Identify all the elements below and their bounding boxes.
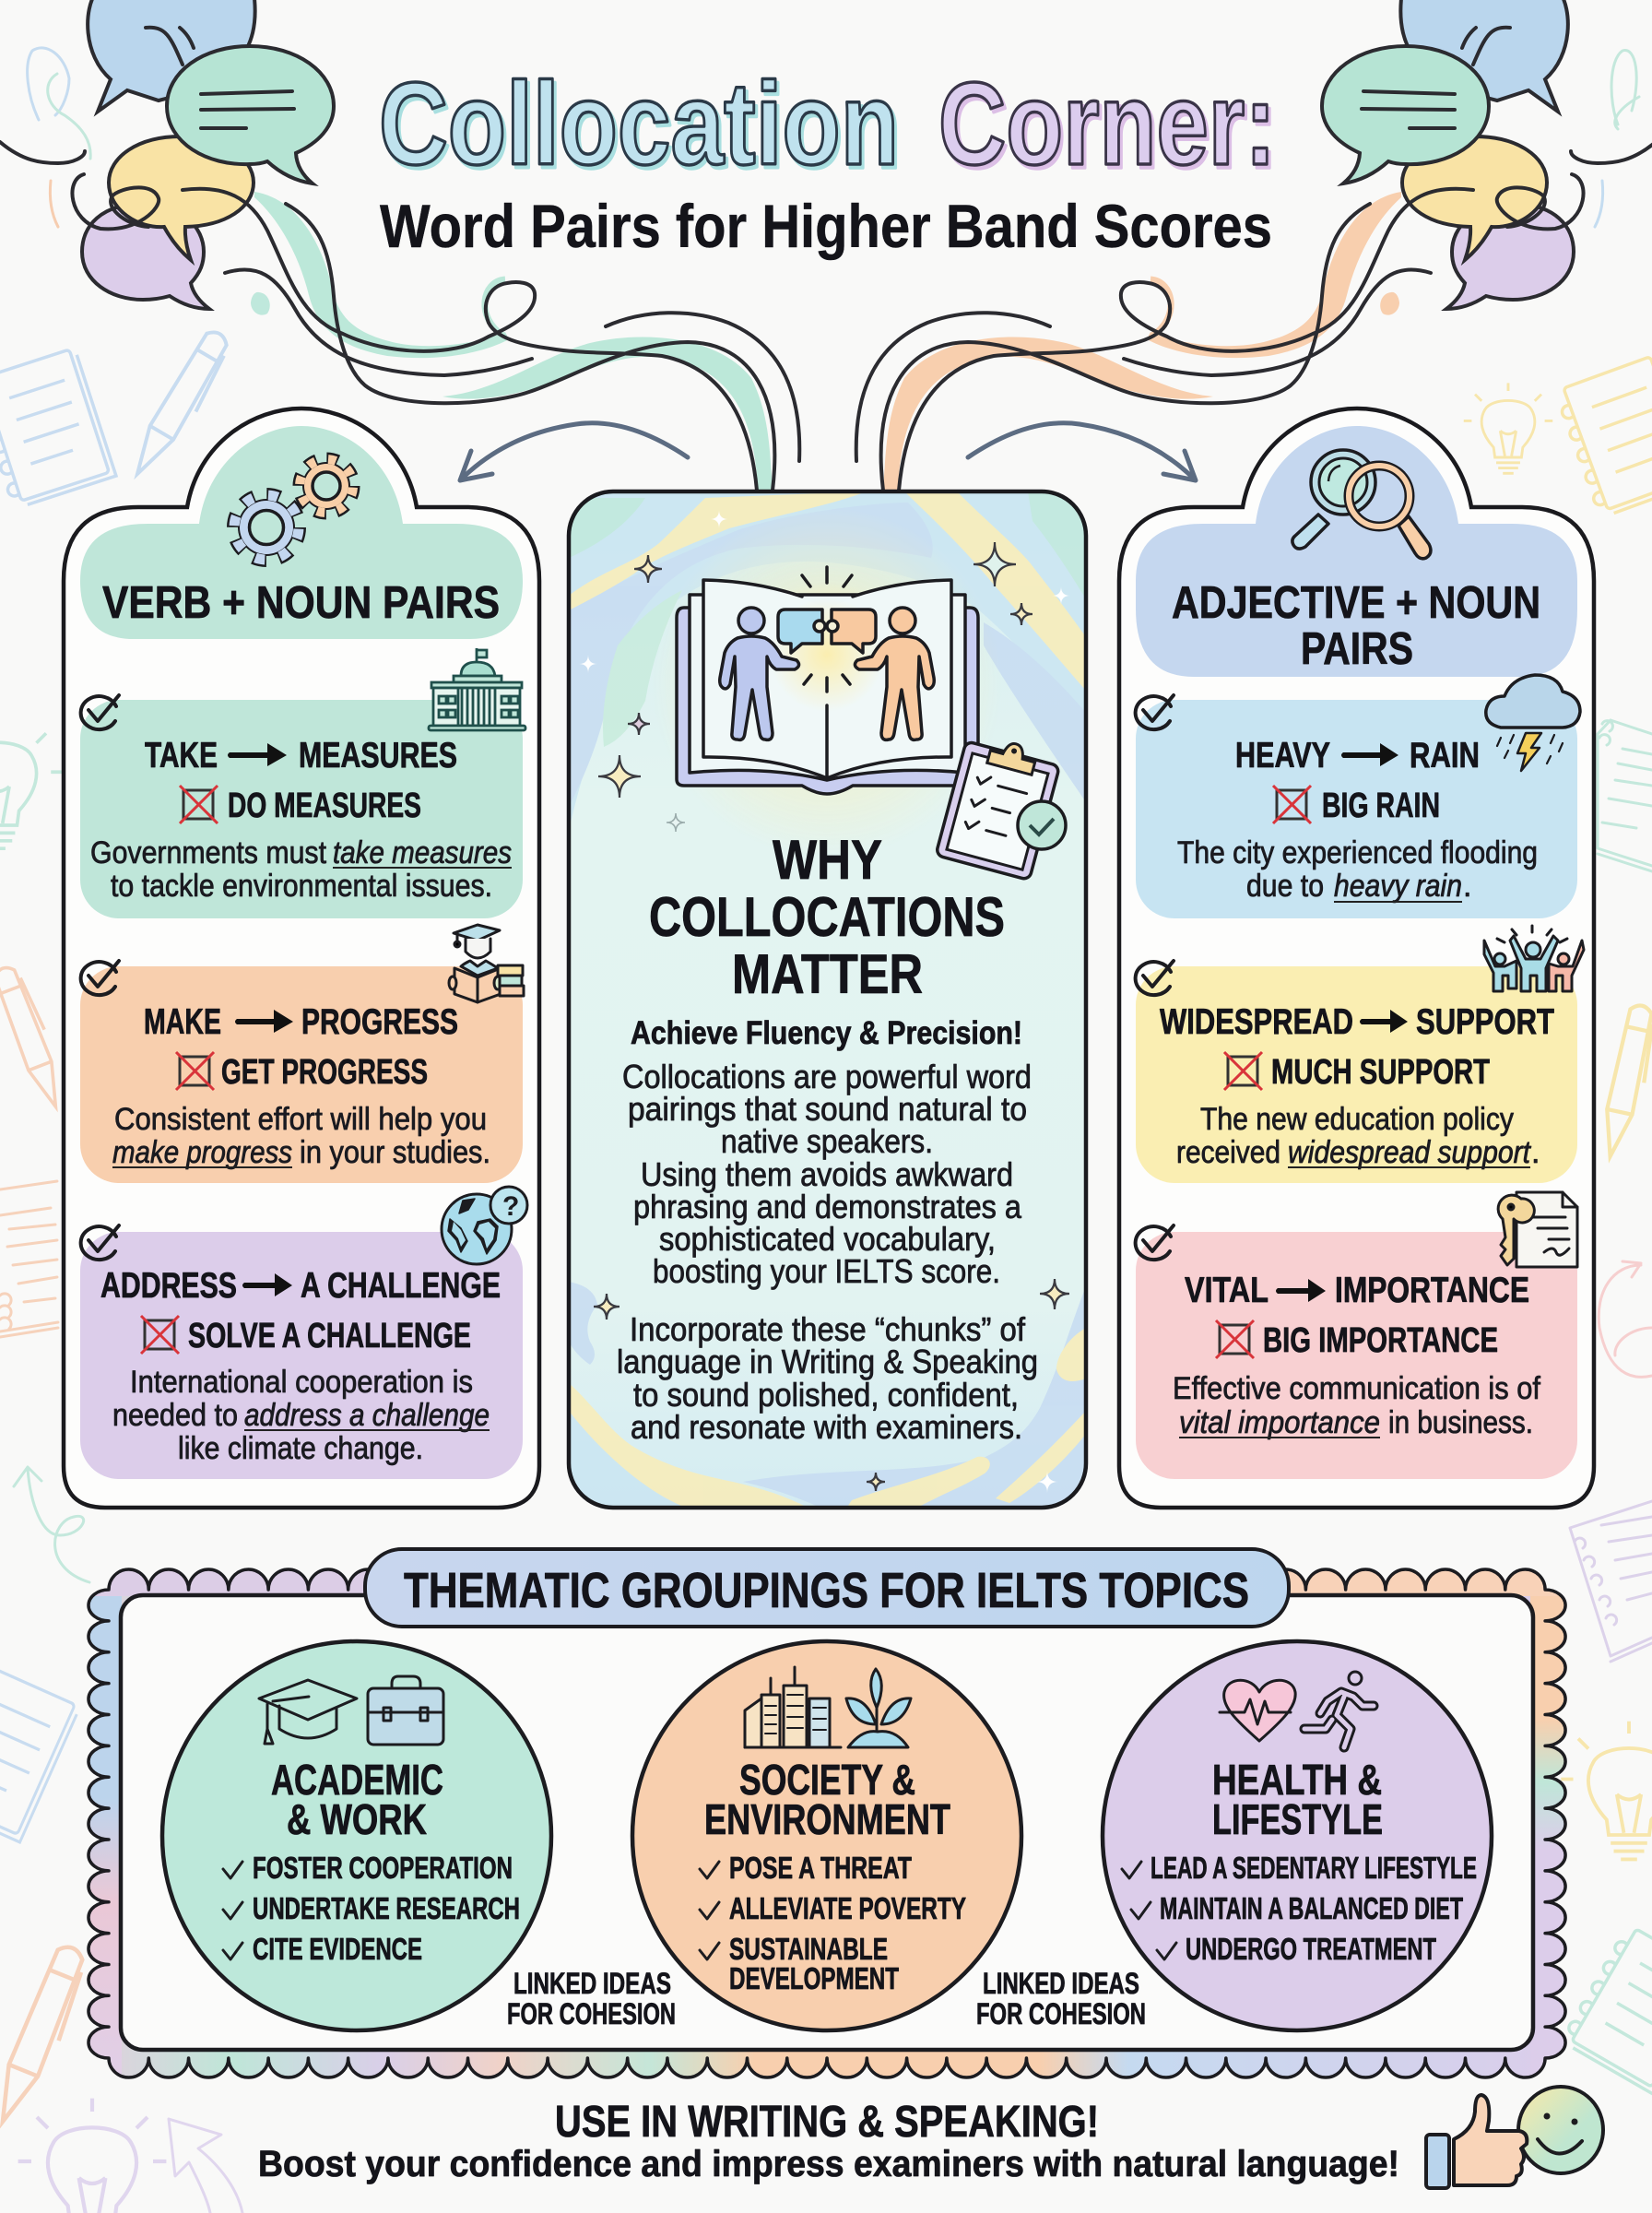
decoration: right speech bubbles and ribbon <box>856 0 1652 491</box>
checklist <box>700 1851 966 1995</box>
checklist: ALLEVIATE POVERTY <box>729 1891 966 1925</box>
checklist <box>223 1851 520 1966</box>
checklist: UNDERTAKE RESEARCH <box>253 1891 520 1925</box>
card: heavy rain: RAIN <box>1410 736 1480 775</box>
icon: city and plant <box>745 1667 911 1747</box>
card: take measures <box>80 648 525 918</box>
example sentence: in business. <box>1388 1405 1533 1440</box>
example sentence: . <box>1531 1135 1540 1170</box>
icon: check <box>81 1225 119 1260</box>
icon: graduation cap and briefcase <box>259 1676 443 1745</box>
pair: make progress: MAKE <box>144 1002 221 1042</box>
circle: health & lifestyle <box>1103 1641 1492 2030</box>
wrong pair: MUCH SUPPORT <box>1271 1053 1490 1092</box>
footer call to action <box>258 2098 1399 2184</box>
card: vital importance <box>1136 1192 1577 1479</box>
example sentence <box>1173 1371 1540 1440</box>
icon: globe with question <box>442 1187 527 1264</box>
card: widespread support <box>1136 926 1584 1183</box>
icon: open book with two people <box>677 567 978 794</box>
arrow <box>1360 1010 1408 1033</box>
title: ENVIRONMENT <box>704 1795 950 1843</box>
icon: storm cloud <box>1486 675 1580 771</box>
body text: pairings that sound natural to <box>628 1090 1027 1128</box>
example sentence: needed to <box>112 1398 238 1433</box>
arrow <box>235 1010 293 1033</box>
title: HEALTH & <box>1212 1756 1382 1804</box>
checklist: DEVELOPMENT <box>729 1961 899 1995</box>
body text: Incorporate these “chunks” of <box>630 1310 1026 1348</box>
arrow <box>242 1273 292 1296</box>
figure: left person <box>720 608 799 740</box>
label: linked ideas 1: FOR COHESION <box>507 1997 676 2030</box>
example sentence: Governments must <box>90 835 326 870</box>
checklist: LEAD A SEDENTARY LIFESTYLE <box>1150 1851 1477 1885</box>
example sentence <box>112 1102 490 1170</box>
example sentence <box>112 1365 490 1466</box>
heading: adjective + noun pairs <box>1172 578 1540 674</box>
checklist: FOSTER COOPERATION <box>253 1851 513 1885</box>
heading pill <box>365 1549 1289 1627</box>
heading: why collocations matter <box>649 829 1005 1005</box>
example sentence: The city experienced flooding <box>1177 835 1538 870</box>
icon: gears <box>234 459 353 560</box>
example sentence: make progress <box>112 1135 292 1170</box>
arrow <box>1276 1279 1326 1302</box>
card: take measures: MEASURES <box>299 736 457 775</box>
subtitle: Word Pairs for Higher Band Scores <box>380 192 1272 260</box>
icon: cross box <box>141 1316 179 1354</box>
icon: key and document <box>1498 1192 1577 1267</box>
heading: adjective + noun pairs: PAIRS <box>1301 624 1413 674</box>
checklist: SUSTAINABLE <box>729 1932 888 1966</box>
example sentence: Consistent effort will help you <box>114 1102 487 1137</box>
icon: heart and runner <box>1220 1672 1374 1747</box>
body text: sophisticated vocabulary, <box>659 1220 996 1258</box>
checklist: CITE EVIDENCE <box>253 1932 422 1966</box>
card: widespread support: SUPPORT <box>1416 1002 1554 1042</box>
card: vital importance: IMPORTANCE <box>1335 1271 1529 1310</box>
example sentence: . <box>1463 869 1471 904</box>
heading: why collocations matter: MATTER <box>732 943 923 1005</box>
icon: check <box>1136 1225 1174 1260</box>
title: ACADEMIC <box>271 1756 443 1804</box>
icon: check <box>81 695 119 729</box>
example sentence: Effective communication is of <box>1173 1371 1540 1406</box>
figure: right person <box>855 608 934 740</box>
example sentence <box>1177 835 1538 904</box>
icon: clipboard checklist <box>936 731 1062 881</box>
example sentence: like climate change. <box>178 1431 423 1466</box>
example sentence: due to <box>1246 869 1324 904</box>
body text: language in Writing & Speaking <box>617 1343 1038 1380</box>
title <box>704 1756 950 1843</box>
decoration: left speech bubbles and ribbon <box>0 0 799 491</box>
example sentence: received <box>1176 1135 1280 1170</box>
body text: boosting your IELTS score. <box>653 1252 1000 1290</box>
panel: verb + noun pairs <box>64 408 539 1508</box>
label: linked ideas 1 <box>507 1967 676 2030</box>
body text: phrasing and demonstrates a <box>633 1188 1022 1225</box>
heading: verb + noun pairs: VERB + NOUN PAIRS <box>102 578 500 628</box>
panel: why collocations matter <box>569 491 1086 1512</box>
example sentence: to tackle environmental issues. <box>111 869 492 904</box>
example sentence: heavy rain <box>1334 869 1462 904</box>
heading: why collocations matter: COLLOCATIONS <box>649 886 1005 948</box>
wrong pair: SOLVE A CHALLENGE <box>188 1317 471 1355</box>
icon: cross box <box>180 786 218 823</box>
icon: cheering crowd <box>1484 926 1584 991</box>
body text: and resonate with examiners. <box>631 1408 1022 1446</box>
body text: native speakers. <box>721 1122 933 1160</box>
sparkles <box>579 510 1070 1493</box>
panel header <box>80 426 523 639</box>
title: & WORK <box>287 1795 427 1843</box>
example sentence: widespread support <box>1288 1135 1531 1170</box>
example sentence: in your studies. <box>300 1135 490 1170</box>
card: heavy rain <box>1136 675 1580 918</box>
icon: green check badge <box>1018 801 1066 849</box>
card: make progress <box>80 925 524 1183</box>
icon: cross box <box>176 1052 214 1090</box>
wrong pair: GET PROGRESS <box>221 1053 428 1092</box>
panel header <box>1136 426 1577 677</box>
icon: check <box>1136 961 1174 995</box>
swirl background <box>569 491 1086 1512</box>
icon: globe with question: ? <box>502 1191 519 1222</box>
label: linked ideas 2: FOR COHESION <box>976 1997 1146 2030</box>
circle: academic & work <box>162 1641 551 2030</box>
arrow <box>1341 743 1398 766</box>
example sentence: take measures <box>333 835 512 870</box>
title: Corner: <box>938 58 1276 189</box>
card: address a challenge: A CHALLENGE <box>301 1266 501 1306</box>
checklist: MAINTAIN A BALANCED DIET <box>1160 1891 1463 1925</box>
example sentence: address a challenge <box>244 1398 490 1433</box>
label: linked ideas 2: LINKED IDEAS <box>983 1967 1139 2000</box>
panel: adjective + noun pairs <box>1119 408 1594 1508</box>
footer call to action: USE IN WRITING & SPEAKING! <box>555 2098 1099 2147</box>
checklist: POSE A THREAT <box>729 1851 912 1885</box>
icon: cross box <box>1216 1320 1254 1358</box>
title <box>271 1756 443 1843</box>
circle: society & environment <box>632 1641 1021 2030</box>
icon: student reading <box>449 925 524 1002</box>
heading: adjective + noun pairs: ADJECTIVE + NOUN <box>1172 578 1540 628</box>
pair: address a challenge: ADDRESS <box>100 1266 237 1306</box>
card: make progress: PROGRESS <box>301 1002 458 1042</box>
heading pill: THEMATIC GROUPINGS FOR IELTS TOPICS <box>404 1563 1249 1618</box>
heading: why collocations matter: WHY <box>773 829 882 891</box>
icon: cross box <box>1273 786 1311 823</box>
example sentence <box>1176 1102 1540 1170</box>
checklist: UNDERGO TREATMENT <box>1186 1932 1436 1966</box>
subheading: Achieve Fluency & Precision! <box>631 1015 1022 1051</box>
pair: take measures: TAKE <box>145 736 218 775</box>
example sentence: vital importance <box>1179 1405 1380 1440</box>
pair: widespread support: WIDESPREAD <box>1160 1002 1353 1042</box>
body text: Collocations are powerful word <box>622 1058 1032 1095</box>
label: linked ideas 1: LINKED IDEAS <box>513 1967 671 2000</box>
title <box>1212 1756 1383 1843</box>
icon: magnifying glasses <box>1292 450 1431 559</box>
wrong pair: BIG RAIN <box>1322 787 1440 825</box>
title: LIFESTYLE <box>1212 1795 1383 1843</box>
icon: thumbs up <box>1426 2095 1527 2188</box>
icon: smiley <box>1518 2087 1603 2173</box>
title: Collocation <box>379 58 899 189</box>
panel: thematic groupings <box>83 1549 1576 2084</box>
checklist <box>1122 1851 1477 1966</box>
body text: to sound polished, confident, <box>633 1376 1019 1414</box>
wrong pair: DO MEASURES <box>228 787 421 825</box>
pair: vital importance: VITAL <box>1185 1271 1268 1310</box>
body text <box>617 1058 1038 1446</box>
card: address a challenge <box>80 1187 527 1479</box>
example sentence: The new education policy <box>1200 1102 1514 1137</box>
example sentence <box>90 835 512 904</box>
arrow <box>228 743 287 766</box>
example sentence: International cooperation is <box>130 1365 473 1400</box>
label: linked ideas 2 <box>976 1967 1146 2030</box>
wrong pair: BIG IMPORTANCE <box>1263 1321 1498 1360</box>
scalloped frame <box>83 1563 1576 2084</box>
icon: check <box>1136 695 1174 729</box>
icon: check <box>81 961 119 995</box>
title: SOCIETY & <box>739 1756 915 1804</box>
pair: heavy rain: HEAVY <box>1235 736 1330 775</box>
icon: government building <box>429 648 525 730</box>
body text: Using them avoids awkward <box>641 1155 1013 1193</box>
icon: joined speech bubbles <box>778 609 876 653</box>
footer call to action: Boost your confidence and impress examiners with natural language! <box>258 2144 1399 2184</box>
icon: cross box <box>1224 1052 1262 1090</box>
